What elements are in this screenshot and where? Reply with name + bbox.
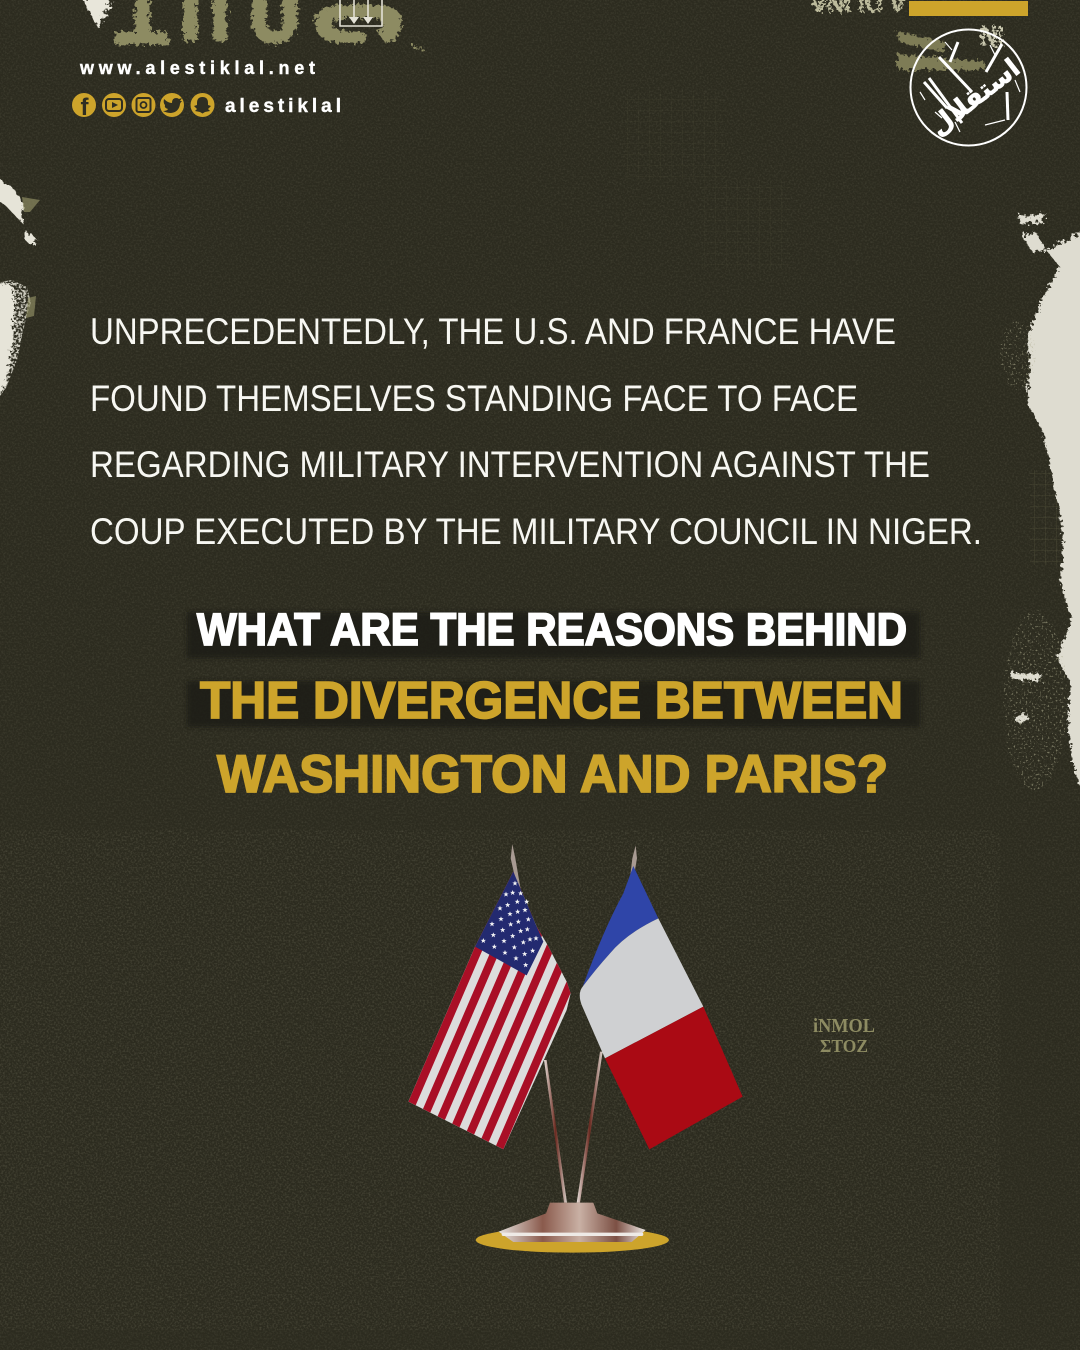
social media icons bbox=[72, 93, 214, 121]
intro paragraph: REGARDING MILITARY INTERVENTION AGAINST THE bbox=[90, 444, 930, 485]
decorative boxed arrows bbox=[340, 0, 382, 26]
heading highlight bars bbox=[187, 612, 920, 727]
flag: United States bbox=[408, 872, 571, 1150]
icon: facebook: f bbox=[80, 94, 90, 121]
flag poles bbox=[511, 844, 637, 1203]
icon: twitter bbox=[160, 93, 184, 117]
torn paper edge: left bbox=[0, 176, 40, 396]
gold base ellipse bbox=[476, 1227, 669, 1253]
intro paragraph: FOUND THEMSELVES STANDING FACE TO FACE bbox=[90, 378, 858, 419]
intro paragraph: UNPRECEDENTEDLY, THE U.S. AND FRANCE HAVE bbox=[90, 311, 896, 352]
icon: youtube bbox=[102, 93, 126, 117]
decorative cropped lettering: top right: NI bbox=[980, 20, 1004, 53]
heading: THE DIVERGENCE BETWEEN bbox=[200, 672, 903, 730]
logo: calligraphic seal: استقلال bbox=[924, 53, 1026, 142]
ghost stamp: iNMOL bbox=[813, 1015, 875, 1037]
decorative cropped lettering: top left bbox=[82, 0, 423, 49]
gold corner bar bbox=[909, 1, 1028, 16]
heading: WASHINGTON AND PARIS? bbox=[217, 745, 888, 804]
stand base bbox=[499, 1203, 646, 1242]
intro paragraph: COUP EXECUTED BY THE MILITARY COUNCIL IN NIGER. bbox=[90, 511, 982, 552]
flag: France bbox=[580, 866, 743, 1149]
website address: www.alestiklal.net bbox=[79, 58, 315, 78]
social handle: alestiklal bbox=[225, 96, 341, 117]
ghost stamp bbox=[813, 1015, 875, 1056]
heading: WHAT ARE THE REASONS BEHIND bbox=[197, 604, 907, 655]
icon: snapchat bbox=[190, 93, 214, 117]
torn paper edge: right bbox=[1000, 214, 1080, 810]
decorative cropped lettering: top right bbox=[810, 0, 1004, 70]
intro paragraph bbox=[90, 311, 982, 552]
flags on desk stand bbox=[390, 823, 743, 1253]
icon: facebook bbox=[72, 93, 96, 121]
stars bbox=[481, 881, 539, 967]
heading bbox=[197, 604, 907, 804]
ghost stamp: ΣTOZ bbox=[820, 1036, 868, 1056]
icon: instagram bbox=[132, 93, 156, 117]
logo: calligraphic seal bbox=[910, 30, 1026, 146]
